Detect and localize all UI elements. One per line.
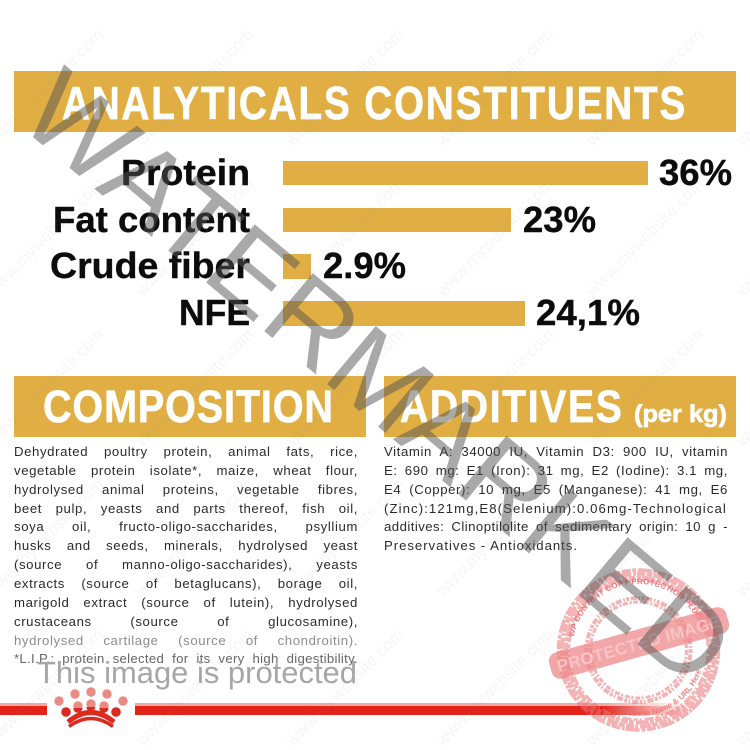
text block: composition ingredients: marigold extract (source of lutein), hydrolysed — [14, 595, 358, 610]
watermark: site address pattern: www.mywebsite.com — [282, 475, 407, 601]
watermark: site address pattern: www.mywebsite.com — [582, 175, 707, 301]
row: protein 36% — [121, 152, 732, 193]
stamp: protected image seal: Website Name & URL Here — [622, 670, 701, 716]
row: crude fiber 2.9%: 2.9% — [323, 245, 406, 286]
watermark: site address pattern: www.mywebsite.com — [282, 325, 407, 451]
text block: composition ingredients: (source of manno-oligo-saccharides), yeasts — [14, 557, 358, 572]
row: NFE 24,1%: NFE — [179, 292, 250, 333]
row: fat content 23%: Fat content — [53, 199, 250, 240]
icon: royal crown logo — [54, 687, 128, 726]
watermark: site address pattern: www.mywebsite.com — [132, 25, 257, 151]
text block: additives list: Preservatives - Antioxidants. — [384, 538, 578, 553]
heading: composition: COMPOSITION — [43, 382, 333, 432]
watermark: site address pattern: www.mywebsite.com — [132, 325, 257, 451]
text block: additives list: Vitamin A: 34000 IU, Vitamin D3: 900 IU, vitamin — [384, 444, 728, 459]
text block: composition ingredients: hydrolysed cartilage (source of chondroitin). — [14, 633, 358, 648]
text block: composition ingredients: extracts (source of betaglucans), borage oil, — [14, 576, 358, 591]
caption: this image is protected: This image is protected — [37, 655, 357, 690]
watermark: site address pattern: www.mywebsite.com — [432, 325, 557, 451]
text block: additives list: E: 690 mg: E1 (Iron): 31 mg, E2 (Iodine): 3.1 mg, — [384, 463, 728, 478]
text block: additives list: E4 (Copper): 10 mg, E5 (Manganese): 41 mg, E6 — [384, 482, 728, 497]
text block: composition ingredients: soya oil, fructo-oligo-saccharides, psyllium — [14, 519, 358, 534]
row: protein 36%: Protein — [121, 152, 250, 193]
text block: additives list — [384, 444, 728, 553]
text block: composition ingredients: husks and seeds, minerals, hydrolysed yeast — [14, 538, 358, 553]
row: crude fiber 2.9% — [50, 245, 406, 286]
footer: red stripe with crown logo — [0, 687, 687, 728]
watermark: site address pattern: www.mywebsite.com — [432, 625, 557, 750]
text block: composition ingredients — [14, 444, 358, 666]
text block: composition ingredients: beet pulp, yeasts and parts thereof, fish oil, — [14, 501, 358, 516]
watermark: site address pattern: www.mywebsite.com — [582, 625, 707, 750]
row: crude fiber 2.9%: Crude fiber — [50, 245, 250, 286]
watermark: site address pattern: www.mywebsite.com — [582, 475, 707, 601]
bar chart: nutrient percentages — [50, 152, 732, 333]
stamp: protected image seal — [548, 568, 730, 732]
row: NFE 24,1% — [179, 292, 640, 333]
watermark: site address pattern: www.mywebsite.com — [132, 625, 257, 750]
row: fat content 23%: 23% — [523, 199, 596, 240]
red stripe left — [0, 703, 47, 715]
row: protein 36%: 36% — [659, 152, 732, 193]
text block: additives list: (Zinc):121mg,E8(Selenium):0.06mg-Technological — [384, 501, 727, 516]
panel: additives — [384, 376, 736, 553]
watermark: site address pattern: www.mywebsite.com — [282, 25, 407, 151]
panel: composition — [14, 376, 366, 666]
text block: composition ingredients: *L.I.P.: protein selected for its very high digestibility. — [14, 651, 358, 666]
watermark: site address pattern: www.mywebsite.com — [432, 25, 557, 151]
watermark: site address pattern: www.mywebsite.com — [282, 625, 407, 750]
watermark: site address pattern: www.mywebsite.com — [132, 175, 257, 301]
watermark: site address pattern: www.mywebsite.com — [432, 475, 557, 601]
text block: composition ingredients: Dehydrated poultry protein, animal fats, rice, — [14, 444, 358, 459]
text block: composition ingredients: crustaceans (source of glucosamine), — [14, 614, 358, 629]
heading: analyticals constituents: ANALYTICALS CONSTITUENTS — [62, 78, 685, 129]
watermark: site address pattern: www.mywebsite.com — [282, 175, 407, 301]
row: NFE 24,1%: 24,1% — [536, 292, 640, 333]
text block: composition ingredients: hydrolysed animal proteins, vegetable fibres, — [14, 482, 358, 497]
text block: composition ingredients: vegetable protein isolate*, maize, wheat flour, — [14, 463, 358, 478]
watermark: site address pattern: www.mywebsite.com — [132, 475, 257, 601]
heading: composition — [14, 376, 366, 437]
heading: additives per kg: ADDITIVES — [400, 381, 622, 432]
red stripe right — [135, 703, 690, 715]
panel: analyticals constituents — [14, 71, 736, 333]
row: fat content 23% — [53, 199, 596, 240]
watermark: site address pattern: www.mywebsite.com — [582, 325, 707, 451]
watermark: site address pattern: www.mywebsite.com — [432, 175, 557, 301]
stamp: protected image seal: WP CONTENT COPY PROTECTION PLUGIN — [568, 578, 705, 636]
watermark: WATERMARKED diagonal text: WATERMARKED — [0, 46, 750, 709]
heading: additives per kg: (per kg) — [634, 401, 727, 428]
watermark: site address pattern: www.mywebsite.com — [582, 25, 707, 151]
heading: additives per kg — [384, 376, 736, 437]
text block: additives list: additives: Clinoptilolite of sedimentary origin: 10 g - — [384, 519, 728, 534]
stamp: protected image seal: PROTECTED IMAGE — [555, 612, 724, 676]
